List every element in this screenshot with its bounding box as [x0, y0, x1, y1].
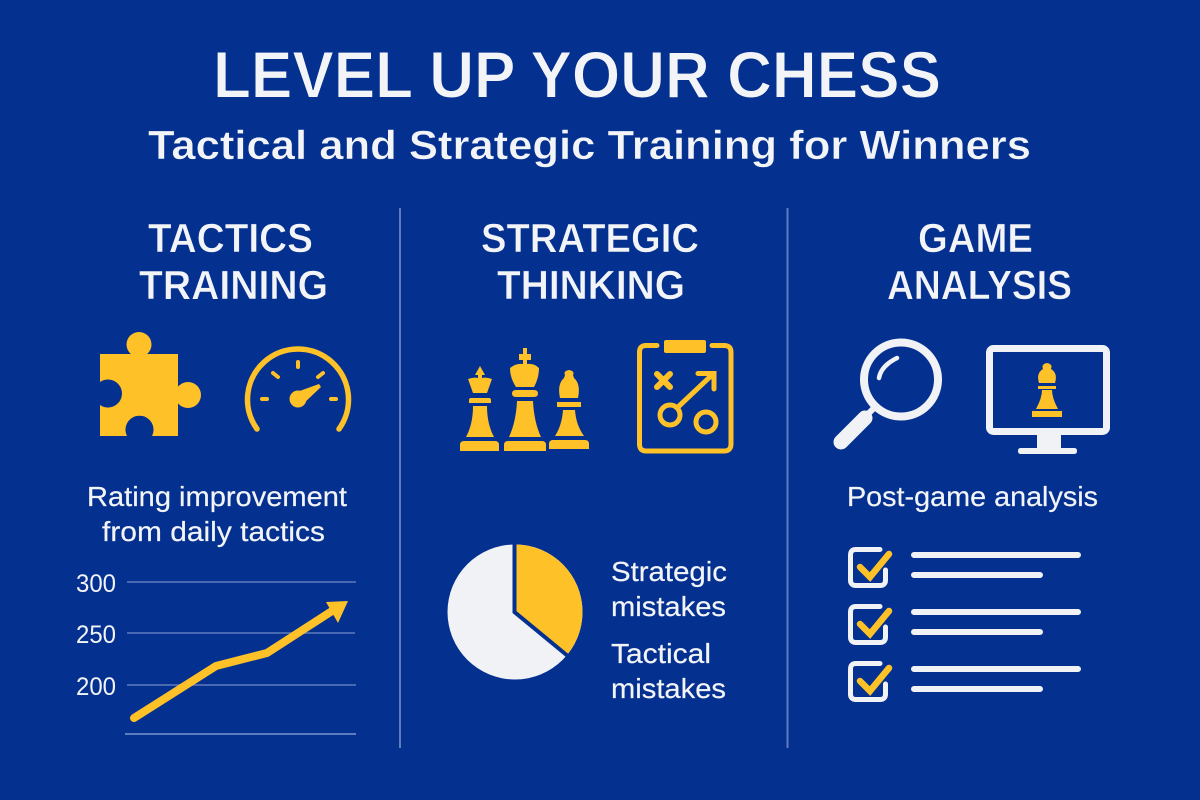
legend: mistakes labels	[611, 556, 727, 704]
icon: chess pieces	[460, 348, 589, 451]
line chart: rating improvement: 250	[76, 621, 116, 649]
panel: strategic thinking	[448, 215, 731, 704]
heading: tactics training	[139, 215, 328, 308]
icon: speedometer gauge	[247, 349, 349, 429]
panel: game analysis	[841, 215, 1106, 700]
heading: tactics training: TACTICS	[148, 215, 313, 261]
text: rating improvement label: from daily tactics	[102, 516, 325, 547]
checklist item 2	[850, 606, 1078, 642]
legend: mistakes labels: mistakes	[611, 673, 726, 704]
checklist item 3	[850, 664, 1078, 700]
text: rating improvement label	[87, 481, 347, 547]
icon: tactics clipboard	[640, 340, 731, 451]
legend: mistakes labels: Tactical	[611, 638, 711, 669]
heading: strategic thinking: STRATEGIC	[481, 215, 699, 261]
icon: monitor with bishop	[990, 348, 1106, 454]
heading: game analysis: GAME	[918, 215, 1033, 261]
icon: magnifying glass	[841, 342, 938, 442]
text: post-game analysis: Post-game analysis	[847, 481, 1098, 512]
bishop	[549, 370, 589, 449]
checklist	[850, 550, 1078, 700]
heading: game analysis	[887, 215, 1072, 308]
heading: tactics training: TRAINING	[139, 262, 328, 308]
checklist item 1	[850, 550, 1078, 586]
heading: game analysis: ANALYSIS	[887, 262, 1072, 308]
legend: mistakes labels: Strategic	[611, 556, 727, 587]
center king	[504, 348, 546, 451]
title: LEVEL UP YOUR CHESS	[213, 38, 941, 112]
text: rating improvement label: Rating improvement	[87, 481, 347, 512]
left king	[460, 366, 499, 451]
arrow: rising rating line	[134, 601, 348, 718]
icon: puzzle piece	[100, 332, 201, 436]
line chart: rating improvement: 300	[76, 570, 116, 598]
panel: tactics training	[76, 215, 356, 734]
line chart: rating improvement	[76, 570, 356, 734]
subtitle: Tactical and Strategic Training for Winners	[148, 122, 1031, 168]
heading: strategic thinking	[481, 215, 699, 308]
legend: mistakes labels: mistakes	[611, 591, 726, 622]
heading: strategic thinking: THINKING	[497, 262, 685, 308]
line chart: rating improvement: 200	[76, 673, 116, 701]
pie chart: mistakes	[448, 543, 582, 680]
